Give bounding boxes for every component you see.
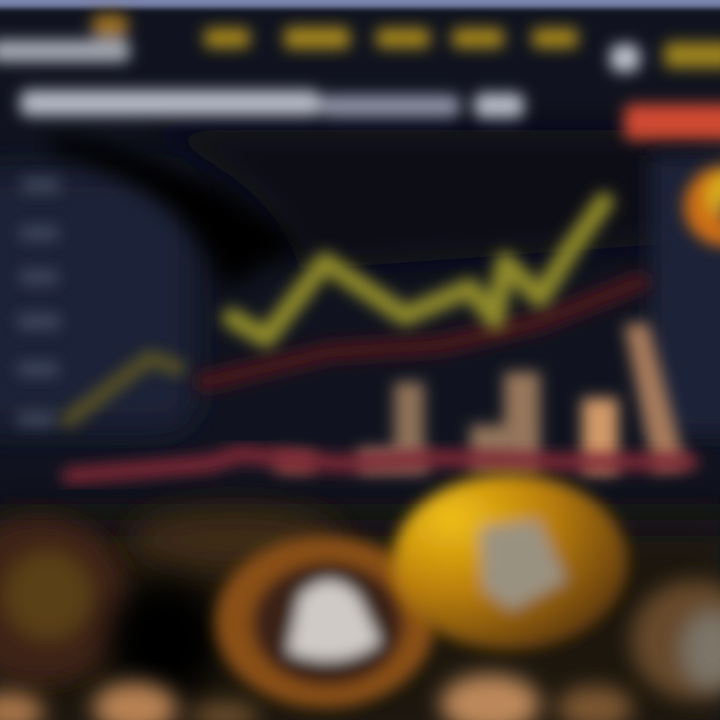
y-axis labels [18,178,60,426]
red badge [624,104,720,140]
chart: faint early gold line [68,358,178,420]
panel: right side [650,155,720,435]
black wedge behind chart [50,135,300,290]
title [20,90,524,118]
coins: warm background glow [0,520,720,720]
coin: bronze center [215,536,435,708]
chart: dark red trend line [205,282,640,382]
panel: left axis area [0,170,195,430]
top light strip [0,0,720,8]
dark central shadow [130,130,720,270]
coin: upper brown back [130,508,340,572]
header: logo [0,14,130,62]
dark gap between coins [110,580,220,700]
coin: right silver [631,580,720,700]
chart: red baseline series [70,454,690,476]
coin: left brown [0,516,130,684]
chart: gold main line [232,202,604,338]
chart: volume bars [275,322,686,474]
header: white icon and gold label [610,42,720,72]
coin: bright gold [392,474,628,650]
coins: bottom row [0,674,633,720]
gauge icon [684,166,720,246]
header: gold navigation labels [204,27,578,49]
